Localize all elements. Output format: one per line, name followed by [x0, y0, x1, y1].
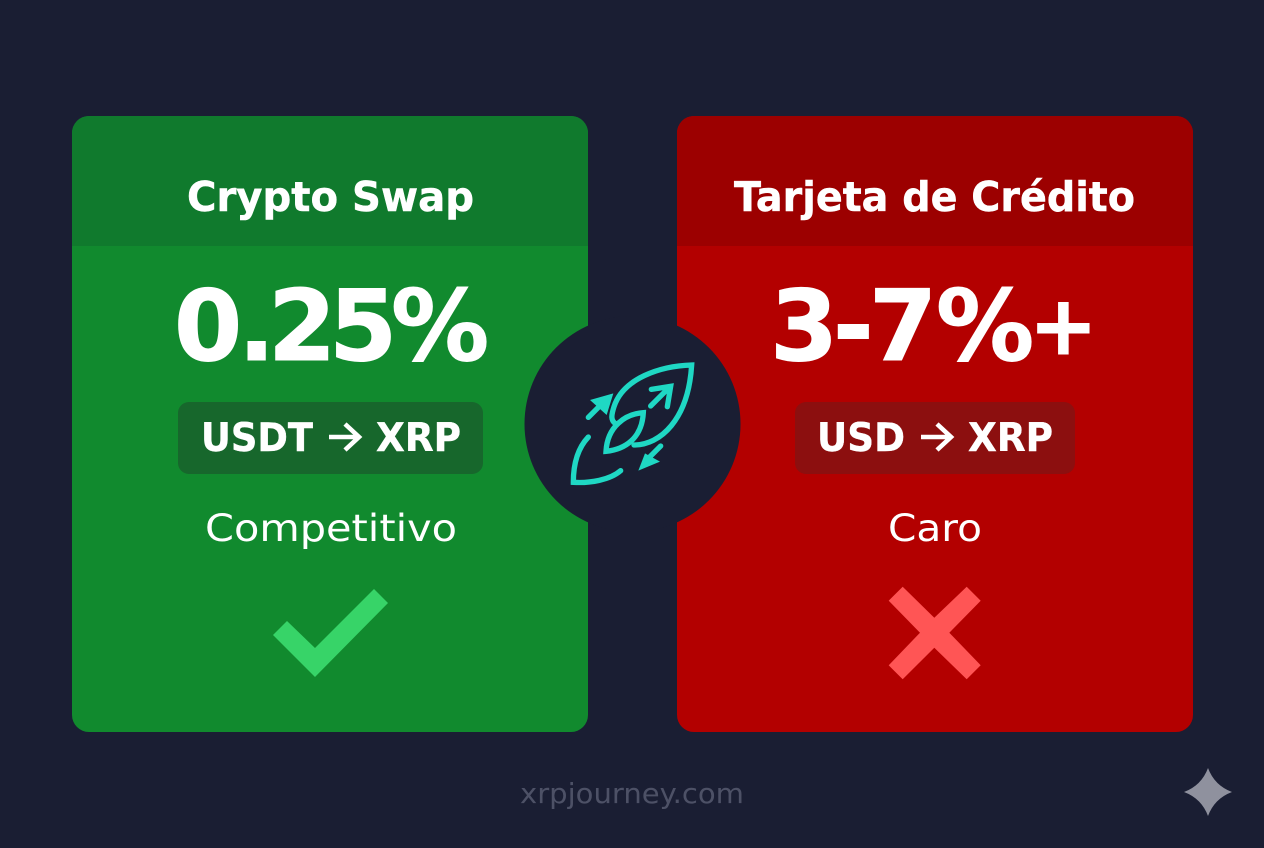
pill: USDT to XRP: [178, 402, 483, 474]
header band: Crypto Swap: [72, 116, 588, 246]
value: 3-7%+: 3-7%: [770, 270, 1034, 384]
pill: USD to XRP: XRP: [968, 416, 1053, 461]
heading: Tarjeta de Crédito: Tarjeta de Crédito: [734, 173, 1135, 221]
pill: USD to XRP: USD: [817, 416, 905, 461]
icon: check mark: [273, 589, 388, 677]
icon: leaf rocket with swap arrows: [573, 365, 692, 483]
value: 3-7%+: +: [1029, 279, 1098, 374]
arrow: [921, 424, 951, 450]
label: Competitivo: Competitivo: [205, 507, 457, 550]
icon: sparkle watermark: [1184, 768, 1232, 816]
header band: Tarjeta de Crédito: [677, 116, 1193, 246]
value: 0.25%: 0.25%: [174, 270, 489, 384]
icon: cross mark: [889, 587, 981, 679]
panel: Crypto Swap: [72, 116, 588, 732]
pill: USD to XRP: [795, 402, 1075, 474]
pill: USDT to XRP: XRP: [376, 416, 461, 461]
footer: website: xrpjourney.com: [520, 777, 744, 810]
center badge with swap icon: [524, 316, 740, 532]
heading: Crypto Swap: Crypto Swap: [187, 173, 474, 221]
label: Caro: Caro: [888, 507, 982, 550]
arrow: [329, 424, 359, 450]
panel: Tarjeta de Crédito: [677, 116, 1193, 732]
pill: USDT to XRP: USDT: [201, 416, 313, 461]
